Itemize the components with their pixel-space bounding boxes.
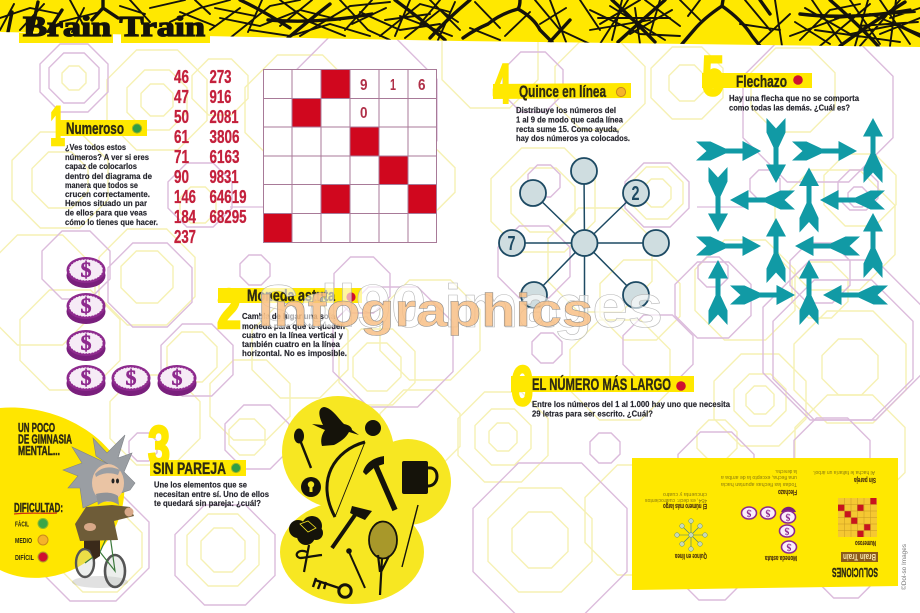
number list bbox=[174, 67, 246, 247]
panel: puzzle 3 intro bbox=[148, 414, 270, 508]
solution: El número más largo: El número más largo bbox=[663, 502, 707, 509]
icon: nail bbox=[346, 548, 365, 588]
legend rows: MEDIO bbox=[15, 536, 32, 545]
text: puzzle 4 instructions: 1 al 9 de modo que cada línea bbox=[516, 116, 624, 124]
text: puzzle 5 instructions bbox=[729, 94, 860, 112]
panel: upside-down solutions bbox=[632, 458, 898, 590]
solution: Moneda astuta: $ bbox=[746, 507, 752, 518]
text: puzzle 1 instructions: números? A ver si eres bbox=[65, 153, 150, 162]
legend rows: DIFÍCIL bbox=[15, 553, 34, 562]
icon: spoon bbox=[294, 428, 311, 468]
text: puzzle 4 instructions: recta sume 15. Como ayuda, bbox=[516, 125, 619, 134]
coins: $ bbox=[80, 257, 92, 282]
number list: 61 bbox=[174, 127, 189, 147]
number list: 9831 bbox=[210, 167, 238, 187]
panel: puzzle 2 intro: 2 bbox=[217, 277, 241, 340]
difficulty dot: hard bbox=[676, 381, 686, 391]
text: puzzle 1 instructions: crucen correctamente. bbox=[65, 190, 150, 199]
panel: puzzle 6 intro: 6 bbox=[511, 354, 533, 417]
icon: key bbox=[313, 578, 351, 597]
star diagram bbox=[499, 158, 669, 318]
solution: Flechazo: una flecha, excepto la de arriba a bbox=[721, 474, 797, 480]
solution: Flechazo: la derecha. bbox=[775, 468, 797, 474]
text: puzzle 3 instructions: Une los elementos que se bbox=[154, 480, 248, 490]
text: puzzle 2 instructions: también cuatro en la línea bbox=[242, 340, 341, 349]
illustration: Einstein on a bicycle bbox=[63, 435, 135, 588]
heading: Sin pareja: SIN PAREJA bbox=[153, 459, 226, 478]
solution: Quince en línea bbox=[675, 519, 707, 559]
text: puzzle 6 instructions bbox=[532, 400, 731, 418]
panel: difficulty legend bbox=[0, 408, 124, 578]
title: Brain Train bbox=[23, 12, 206, 43]
number list: 90 bbox=[174, 167, 189, 187]
solution: Flechazo: Flechazo bbox=[778, 488, 797, 495]
text: puzzle 1 instructions: de ellos para que veas bbox=[65, 208, 148, 218]
icon: rose bbox=[289, 516, 323, 572]
icon: keyhole bbox=[301, 477, 321, 497]
number list: 146 bbox=[174, 187, 196, 207]
label: Dificultad: DIFICULTAD: bbox=[14, 501, 63, 515]
icon: arrow line bbox=[402, 505, 418, 567]
number list: 3806 bbox=[210, 127, 240, 147]
number list: 46 bbox=[174, 67, 189, 87]
legend rows: FÁCIL bbox=[15, 520, 29, 528]
solution: El número más largo: cincuenta y cuatro bbox=[663, 491, 707, 497]
heading: Moneda astuta: Moneda astuta bbox=[247, 286, 335, 305]
icon: mug bbox=[402, 461, 437, 494]
text: puzzle 1 instructions: ¿Ves todos estos bbox=[65, 143, 127, 152]
difficulty dot: easy bbox=[132, 124, 142, 133]
brown tag: Brain Train: Brain Train bbox=[843, 552, 876, 562]
text: puzzle 1 instructions: manera que todos se bbox=[65, 181, 138, 190]
crossword grid: 1 bbox=[390, 77, 396, 94]
text: puzzle 1 instructions: Hemos situado un par bbox=[65, 199, 147, 208]
number list: 68295 bbox=[210, 207, 246, 227]
crossword grid bbox=[263, 70, 437, 242]
number list: 184 bbox=[174, 207, 196, 227]
coins: $ bbox=[80, 365, 92, 390]
text: puzzle 2 instructions: cuatro en la línea vertical y bbox=[242, 331, 344, 340]
panel: puzzle 1 intro bbox=[50, 94, 158, 227]
text: puzzle 2 instructions: moneda para que te queden bbox=[242, 322, 345, 331]
coins: $ bbox=[172, 365, 182, 390]
text: puzzle 6 instructions: Entre los números del 1 al 1.000 hay uno que necesita bbox=[532, 400, 731, 409]
difficulty dot: easy bbox=[231, 463, 241, 473]
panel: puzzle 6 intro bbox=[511, 354, 731, 418]
heading: Un poco de gimnasia mental: UN POCO bbox=[18, 421, 55, 435]
solution: Moneda astuta: $ bbox=[766, 507, 770, 518]
text: puzzle 4 instructions: hay dos números ya colocados. bbox=[516, 134, 630, 143]
difficulty dot: hard bbox=[793, 75, 803, 85]
heading: Un poco de gimnasia mental: MENTAL... bbox=[18, 444, 60, 458]
heading: Numeroso: Numeroso bbox=[66, 119, 124, 138]
text: puzzle 3 instructions: necesitan entre sí. Uno de ellos bbox=[154, 490, 270, 499]
number list: 237 bbox=[174, 227, 196, 247]
panel: puzzle 5 intro bbox=[702, 44, 860, 112]
coins bbox=[66, 257, 196, 396]
star diagram: 2 bbox=[632, 183, 640, 205]
solution: Numeroso: Numeroso bbox=[855, 539, 876, 546]
icon: bow bbox=[327, 442, 365, 517]
text: puzzle 6 instructions: 29 letras para ser escrito. ¿Cuál? bbox=[532, 410, 653, 418]
text: puzzle 4 instructions bbox=[516, 106, 630, 143]
arrows puzzle bbox=[696, 118, 888, 325]
text: puzzle 2 instructions: horizontal. No es imposible. bbox=[242, 349, 347, 358]
solution: Moneda astuta bbox=[742, 507, 797, 561]
watermark: Sdl90 images bbox=[257, 273, 663, 340]
crossword grid: 6 bbox=[418, 77, 426, 94]
solutions heading: SOLUCIONES bbox=[832, 565, 878, 580]
icon: ball bbox=[365, 420, 381, 436]
solution: El número más largo: 454, es decir: cuatrocientos bbox=[645, 497, 707, 503]
text: puzzle 3 instructions bbox=[154, 480, 270, 508]
difficulty dot: medium bbox=[346, 292, 356, 302]
panel: puzzle 2 intro bbox=[217, 277, 362, 358]
solution: Numeroso bbox=[838, 498, 877, 546]
panel: puzzle 1 intro: 1 bbox=[50, 94, 65, 157]
number list: 47 bbox=[174, 87, 189, 107]
watermark: Infographics bbox=[258, 284, 593, 336]
solution: Sin pareja bbox=[813, 469, 876, 483]
difficulty dot: medium bbox=[616, 87, 626, 97]
solution: El número más largo bbox=[645, 491, 707, 509]
number list: 50 bbox=[174, 107, 189, 127]
text: puzzle 3 instructions: te quedará sin pareja: ¿cuál? bbox=[154, 499, 261, 508]
text: puzzle 1 instructions: capaz de colocarlos bbox=[65, 162, 138, 171]
solution: Flechazo bbox=[721, 468, 797, 495]
text: puzzle 1 instructions: cómo lo tienes que hacer. bbox=[65, 218, 158, 227]
text: puzzle 1 instructions bbox=[65, 143, 158, 227]
solution: Sin pareja: Al hacha le faltaría un árbol. bbox=[813, 469, 875, 475]
text: puzzle 5 instructions: Hay una flecha que no se comporta bbox=[729, 94, 860, 103]
coins: $ bbox=[126, 365, 136, 390]
text: puzzle 2 instructions: Cambia de lugar una sola bbox=[242, 312, 336, 321]
heading: Quince en línea: Quince en línea bbox=[519, 82, 606, 101]
solution: Flechazo: Todas las flechas apuntan hacia bbox=[721, 481, 797, 487]
solution: Moneda astuta: Moneda astuta bbox=[765, 554, 797, 561]
number list: 64619 bbox=[210, 187, 246, 207]
solution: Moneda astuta: $ bbox=[786, 511, 790, 522]
number list: 916 bbox=[210, 87, 232, 107]
header band with black branches bbox=[0, 0, 920, 47]
text: puzzle 4 instructions: Distribuye los números del bbox=[516, 106, 616, 115]
icon: axe bbox=[332, 506, 372, 548]
number list: 273 bbox=[210, 67, 232, 87]
legend rows bbox=[15, 518, 48, 562]
panel: puzzle 4 intro bbox=[493, 52, 631, 143]
heading: Un poco de gimnasia mental bbox=[18, 421, 72, 458]
text: puzzle 5 instructions: como todas las demás. ¿Cuál es? bbox=[729, 104, 850, 112]
text: puzzle 1 instructions: dentro del diagrama de bbox=[65, 172, 153, 181]
solution: Moneda astuta: $ bbox=[786, 541, 792, 552]
crossword grid: 9 bbox=[360, 77, 368, 94]
panel: puzzle 3 intro: 3 bbox=[148, 414, 170, 477]
heading: Un poco de gimnasia mental: DE GIMNASIA bbox=[18, 432, 72, 446]
icon: tennis racket bbox=[369, 522, 397, 595]
icon: bird bbox=[312, 407, 359, 446]
panel: puzzle 4 intro: 4 bbox=[493, 52, 511, 115]
text: puzzle 2 instructions bbox=[242, 312, 347, 358]
panel: puzzle 5 intro: 5 bbox=[702, 44, 724, 107]
coins: $ bbox=[80, 293, 92, 318]
icon: hammer bbox=[363, 456, 395, 510]
crossword grid: 0 bbox=[360, 105, 368, 122]
panel: silhouette objects on yellow blob bbox=[280, 396, 451, 604]
heading: Flechazo: Flechazo bbox=[736, 72, 787, 91]
solution: Sin pareja: Sin pareja bbox=[854, 476, 876, 483]
solution: Moneda astuta: $ bbox=[784, 525, 790, 536]
number list: 71 bbox=[174, 147, 189, 167]
coins: $ bbox=[80, 330, 92, 355]
label: Dificultad bbox=[14, 501, 63, 515]
number list: 2081 bbox=[210, 107, 238, 127]
star diagram: 7 bbox=[508, 233, 516, 255]
heading: El número más largo: EL NÚMERO MÁS LARGO bbox=[532, 375, 671, 394]
number list: 6163 bbox=[210, 147, 240, 167]
solution: Quince en línea: Quince en línea bbox=[675, 552, 707, 559]
copyright credit: ©Dol-so Images bbox=[900, 543, 908, 590]
